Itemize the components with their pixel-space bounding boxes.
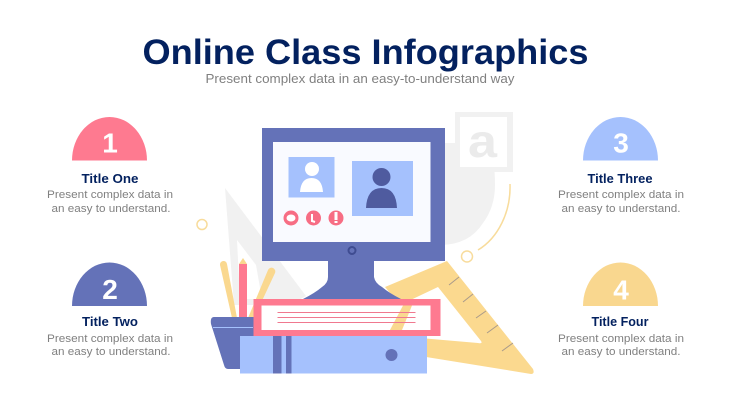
heading: title four: Title Four xyxy=(592,314,648,329)
heading: title two: Title Two xyxy=(82,314,138,329)
text block: item 3 description: an easy to understand. xyxy=(562,203,680,215)
monitor frame xyxy=(262,128,445,261)
text block: item 1 description: an easy to understand. xyxy=(52,203,170,215)
text block: item 1 description: Present complex data in xyxy=(47,189,173,201)
subtitle: Present complex data in an easy-to-understand way xyxy=(206,72,515,86)
text block: item 2 description: Present complex data in xyxy=(47,333,173,345)
grey triangle ruler xyxy=(225,188,306,305)
blue book xyxy=(240,336,427,374)
badge: number 3: 3 xyxy=(613,128,629,158)
text block: item 3 description: Present complex data in xyxy=(558,189,684,201)
icon: letter a card xyxy=(455,112,513,172)
icon: letter a card: a xyxy=(468,115,497,167)
power button xyxy=(348,247,356,254)
student video tile xyxy=(288,157,334,198)
title: Online Class Infographics xyxy=(142,33,588,72)
monitor xyxy=(262,128,445,299)
decorative circle right xyxy=(462,251,472,262)
text block: item 3 description xyxy=(558,189,684,215)
heading: title one: Title One xyxy=(82,171,138,186)
yellow set square xyxy=(385,261,534,374)
text block: item 1 description xyxy=(47,189,173,215)
pink book xyxy=(254,299,440,336)
background grey blob xyxy=(440,143,495,245)
text block: item 4 description: an easy to understand. xyxy=(562,346,680,358)
panel: item 3 xyxy=(558,117,684,215)
illustration: online class desk xyxy=(197,112,534,374)
monitor screen xyxy=(273,142,430,242)
icon: microphone button xyxy=(328,210,344,226)
text block: item 2 description xyxy=(47,333,173,358)
decorative circle left xyxy=(197,220,207,230)
badge: number 4: 4 xyxy=(613,274,629,306)
text block: item 4 description xyxy=(558,333,684,358)
pencil cup with pencils xyxy=(211,258,275,369)
panel: item 4 xyxy=(558,262,684,358)
icon: chat button xyxy=(284,210,298,226)
teacher video tile xyxy=(352,161,413,216)
text block: item 4 description: Present complex data in xyxy=(558,333,684,345)
text block: item 2 description: an easy to understand. xyxy=(52,346,170,358)
heading: title three: Title Three xyxy=(588,171,652,186)
badge: number 1: 1 xyxy=(102,128,118,158)
decorative arc xyxy=(478,184,510,250)
panel: item 1 xyxy=(47,117,173,215)
panel: item 2 xyxy=(47,262,173,358)
monitor stand xyxy=(303,260,401,299)
icon: phone button xyxy=(306,210,321,226)
badge: number 2: 2 xyxy=(102,274,118,305)
